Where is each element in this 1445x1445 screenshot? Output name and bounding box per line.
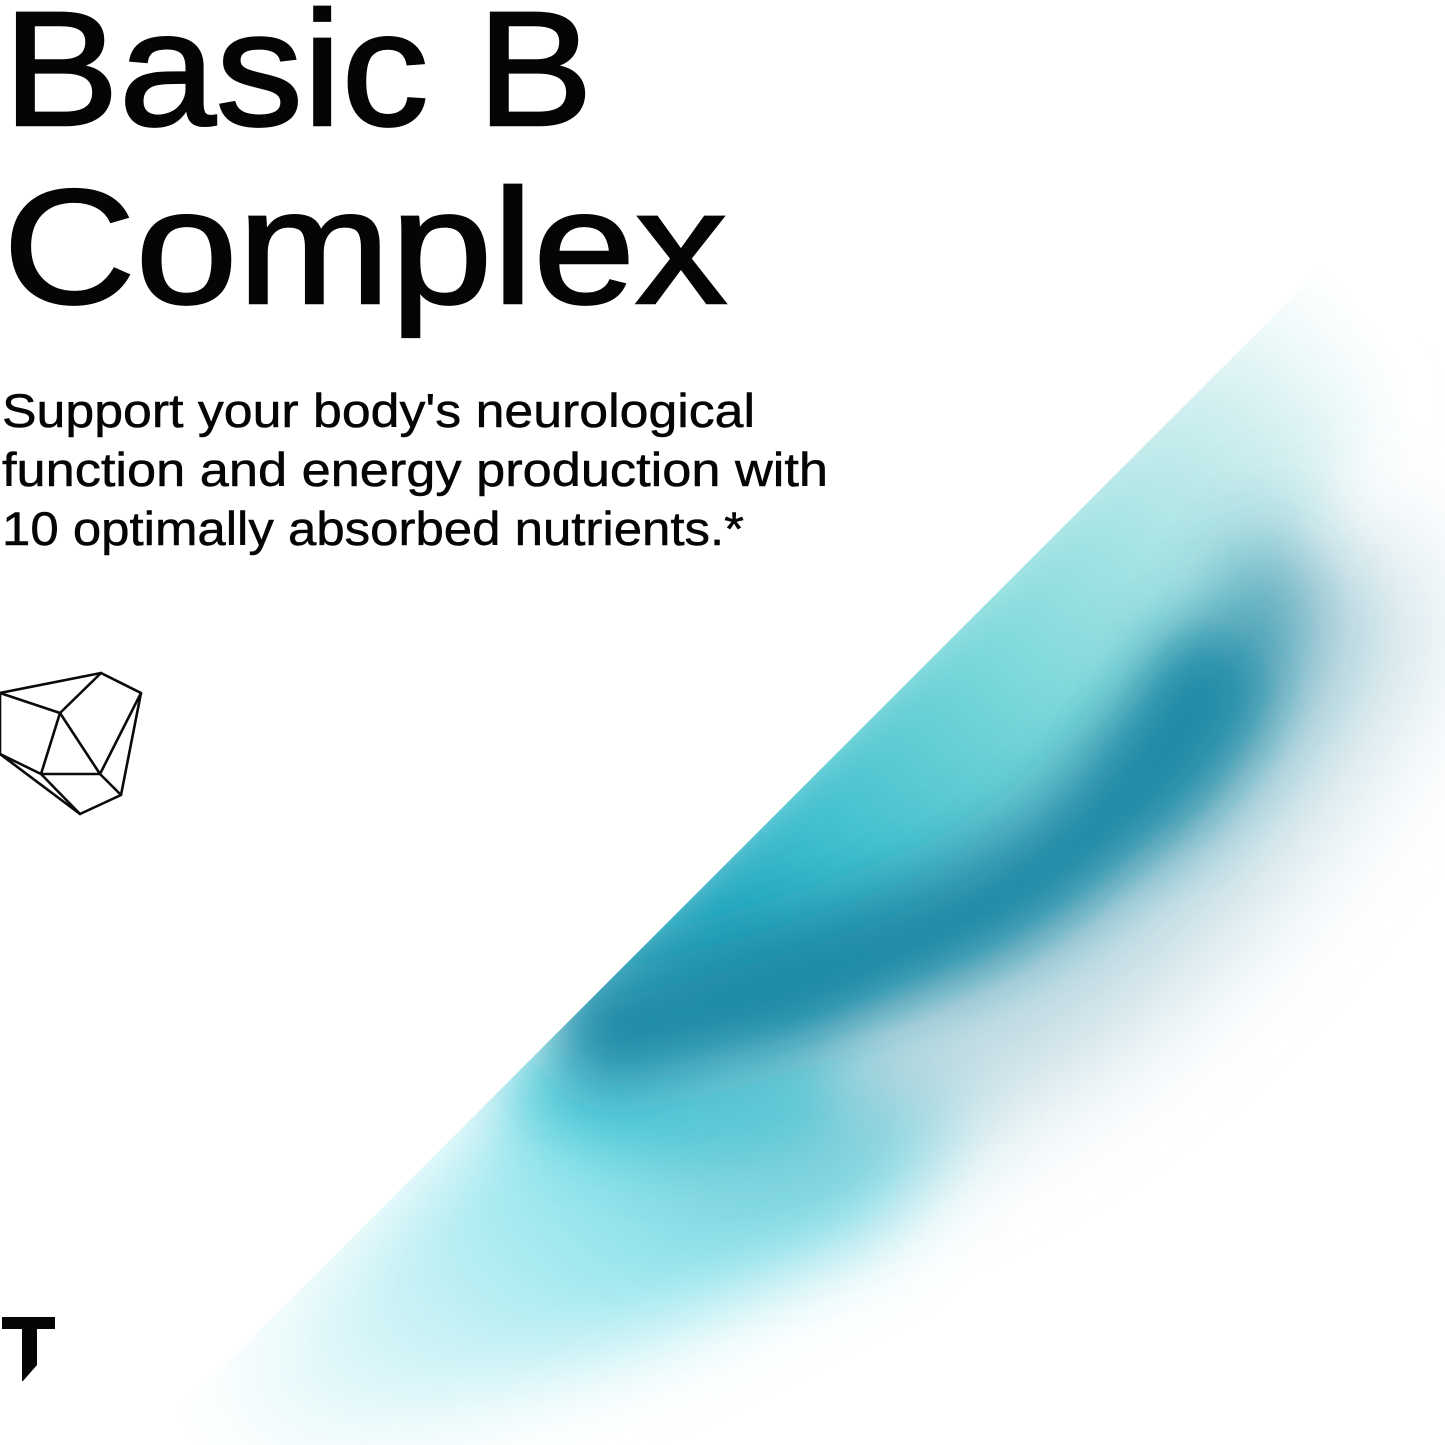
description text xyxy=(2,384,828,555)
gradient: teal diagonal light shape xyxy=(170,250,1380,1445)
icon: geometric crystal xyxy=(0,673,141,814)
title xyxy=(3,0,727,338)
description text: function and energy production with xyxy=(2,443,828,496)
icon: brand T logo xyxy=(2,1317,55,1381)
title: Complex xyxy=(3,155,727,338)
description text: Support your body's neurological xyxy=(2,384,755,437)
description text: 10 optimally absorbed nutrients.* xyxy=(2,502,744,555)
